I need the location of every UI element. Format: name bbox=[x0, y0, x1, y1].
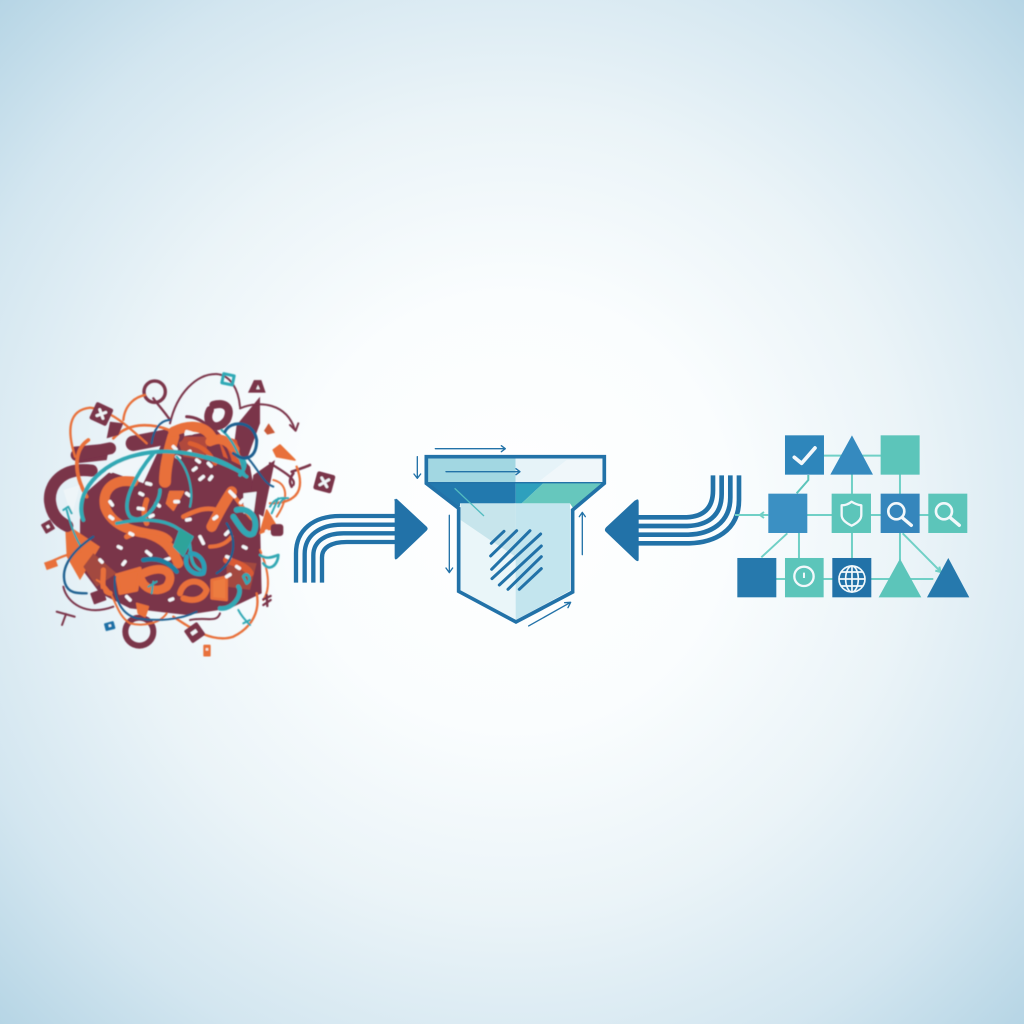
node: clock bbox=[785, 558, 824, 597]
arrow: left striped input arrow bbox=[296, 499, 428, 583]
navy strands bbox=[64, 420, 273, 620]
node: bottom dark square bbox=[737, 558, 776, 597]
orange strands bbox=[47, 395, 300, 638]
tangle core mass bbox=[63, 397, 275, 615]
small flow arrows bbox=[414, 446, 585, 626]
panel: filter funnel bbox=[414, 446, 605, 626]
node: middle blue square bbox=[768, 494, 807, 533]
white flecks bbox=[100, 432, 270, 600]
striped curved shaft bbox=[296, 516, 397, 583]
node: bottom blue triangle bbox=[927, 558, 969, 597]
scattered glyph tiles bbox=[41, 374, 336, 657]
node: top teal square bbox=[881, 435, 920, 475]
panel: tangled chaos bbox=[41, 374, 336, 657]
arrow: right striped input arrow bbox=[605, 475, 739, 561]
panel: ordered network bbox=[735, 435, 969, 597]
node: magnifier teal bbox=[928, 494, 967, 533]
arrowhead bbox=[605, 499, 639, 561]
maroon loops bbox=[50, 374, 310, 646]
teal diagonal glint bbox=[455, 488, 484, 516]
node: top triangle bbox=[830, 435, 873, 475]
funnel neck rim bbox=[426, 481, 604, 485]
node: shield bbox=[832, 494, 871, 533]
hatched filter circle bbox=[491, 531, 541, 589]
node: magnifier blue bbox=[881, 494, 920, 533]
node: globe bbox=[832, 558, 871, 597]
node: check square bbox=[785, 435, 824, 475]
funnel outline bbox=[426, 457, 604, 622]
connector lines bbox=[735, 456, 941, 579]
node: bottom teal triangle bbox=[879, 559, 921, 597]
arrowhead bbox=[394, 499, 428, 559]
funnel translucent fills bbox=[427, 458, 605, 621]
striped curved shaft bbox=[638, 475, 739, 543]
teal strands bbox=[63, 430, 288, 625]
